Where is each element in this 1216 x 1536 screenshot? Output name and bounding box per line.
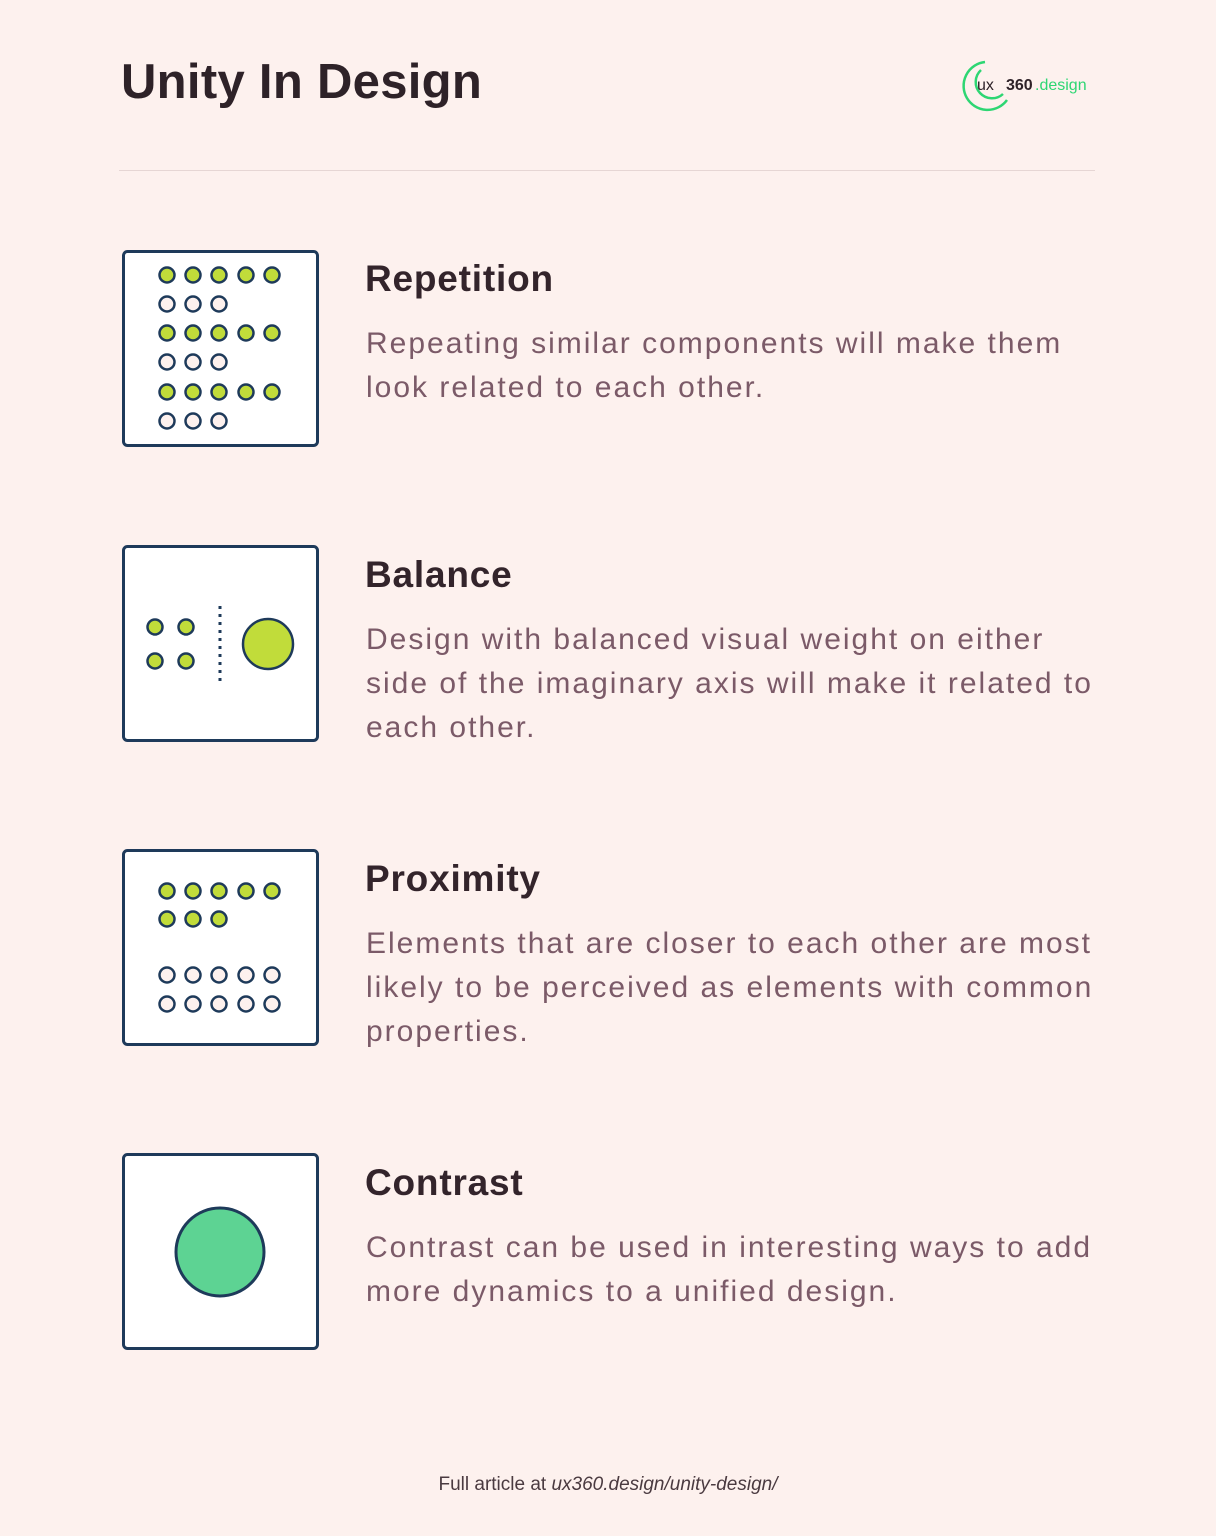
heading: balance: Balance (365, 554, 513, 595)
text: proximity: Elements that are closer to each other are most (366, 927, 1092, 960)
text: balance: side of the imaginary axis will make it related to (366, 667, 1093, 700)
footer: Full article at ux360.design/unity-design/ (438, 1474, 778, 1495)
text: proximity: properties. (366, 1015, 530, 1048)
heading: repetition: Repetition (365, 258, 554, 299)
logo (962, 60, 1087, 112)
heading: proximity: Proximity (365, 858, 541, 899)
text: balance: Design with balanced visual weight on either (366, 623, 1044, 656)
text: repetition (366, 327, 1062, 404)
text: repetition: look related to each other. (366, 371, 765, 404)
text: proximity: likely to be perceived as elements with common (366, 971, 1093, 1004)
icon: repetition (122, 250, 319, 447)
text: balance: each other. (366, 711, 536, 744)
text: contrast: more dynamics to a unified design. (366, 1275, 898, 1308)
icon: balance (122, 545, 319, 742)
logo: ux (977, 77, 994, 94)
text: contrast: Contrast can be used in interesting ways to add (366, 1231, 1092, 1264)
icon: proximity (122, 849, 319, 1046)
title: Unity In Design (121, 55, 482, 109)
text: repetition: Repeating similar components will make them (366, 327, 1062, 360)
logo: 360 (1006, 77, 1033, 94)
heading: contrast: Contrast (365, 1162, 524, 1203)
text: balance (366, 623, 1093, 744)
text: contrast (366, 1231, 1092, 1308)
logo: .design (1035, 77, 1087, 94)
icon: contrast (122, 1153, 319, 1350)
text: proximity (366, 927, 1093, 1048)
